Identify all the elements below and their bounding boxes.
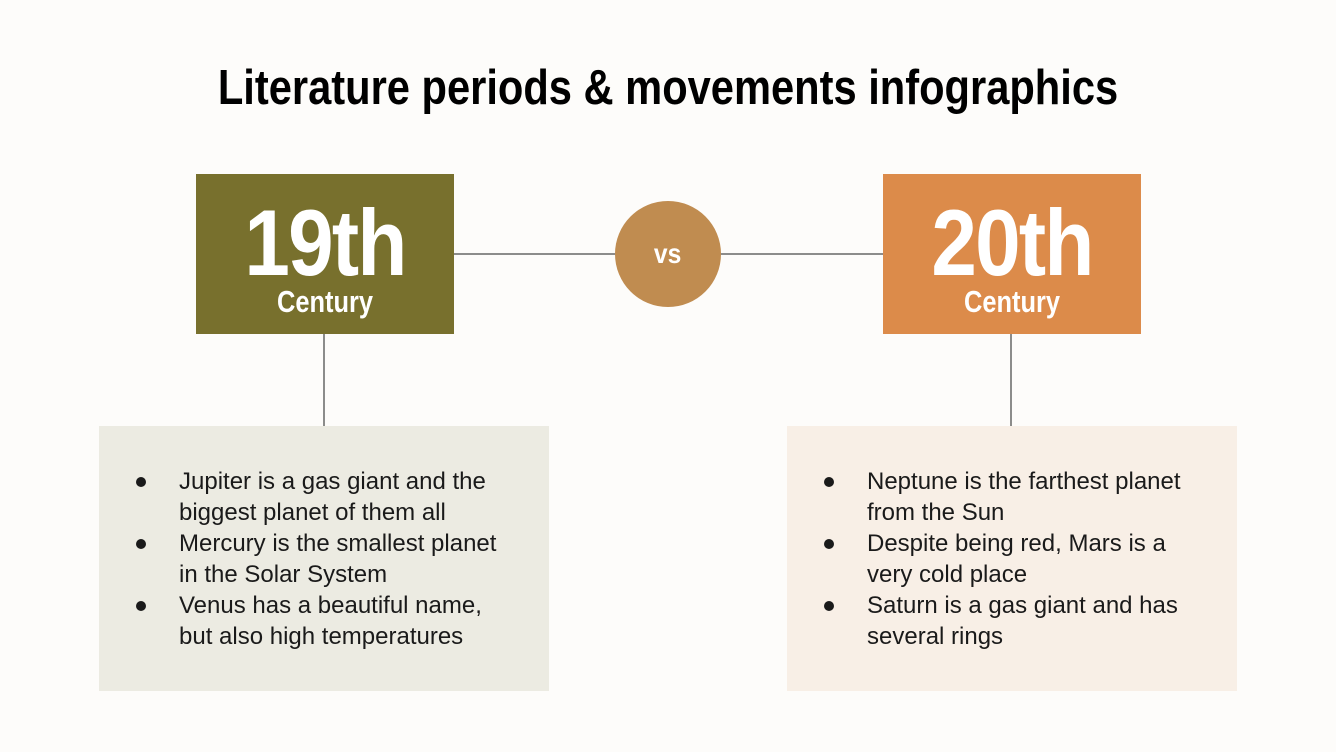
panel: 20th century list: several rings xyxy=(867,623,1003,650)
box: 19th century xyxy=(196,174,454,334)
panel: 19th century list: Jupiter is a gas giant and the xyxy=(179,468,486,495)
box: 19th century: 19th xyxy=(244,190,406,295)
panel: 19th century list: Venus has a beautiful name, xyxy=(179,592,482,619)
panel: 20th century list: Neptune is the farthest planet xyxy=(867,468,1181,495)
panel: 20th century list: Saturn is a gas giant and has xyxy=(867,592,1178,619)
box: 19th century: Century xyxy=(277,284,373,319)
panel: 20th century list: very cold place xyxy=(867,561,1027,588)
panel: 20th century list: from the Sun xyxy=(867,499,1004,526)
box: 20th century xyxy=(883,174,1141,334)
panel: 19th century list xyxy=(99,426,549,691)
panel: 19th century list: but also high temperatures xyxy=(179,623,463,650)
panel: 19th century list: Mercury is the smallest planet xyxy=(179,530,496,557)
vs circle: vs xyxy=(654,238,682,269)
vs circle xyxy=(615,201,721,307)
panel: 20th century list: Despite being red, Mars is a xyxy=(867,530,1166,557)
panel: 20th century list xyxy=(787,426,1237,691)
title: Literature periods & movements infographics xyxy=(218,61,1118,115)
box: 20th century: 20th xyxy=(931,190,1093,295)
panel: 19th century list: biggest planet of them all xyxy=(179,499,446,526)
panel: 19th century list: in the Solar System xyxy=(179,561,387,588)
box: 20th century: Century xyxy=(964,284,1060,319)
